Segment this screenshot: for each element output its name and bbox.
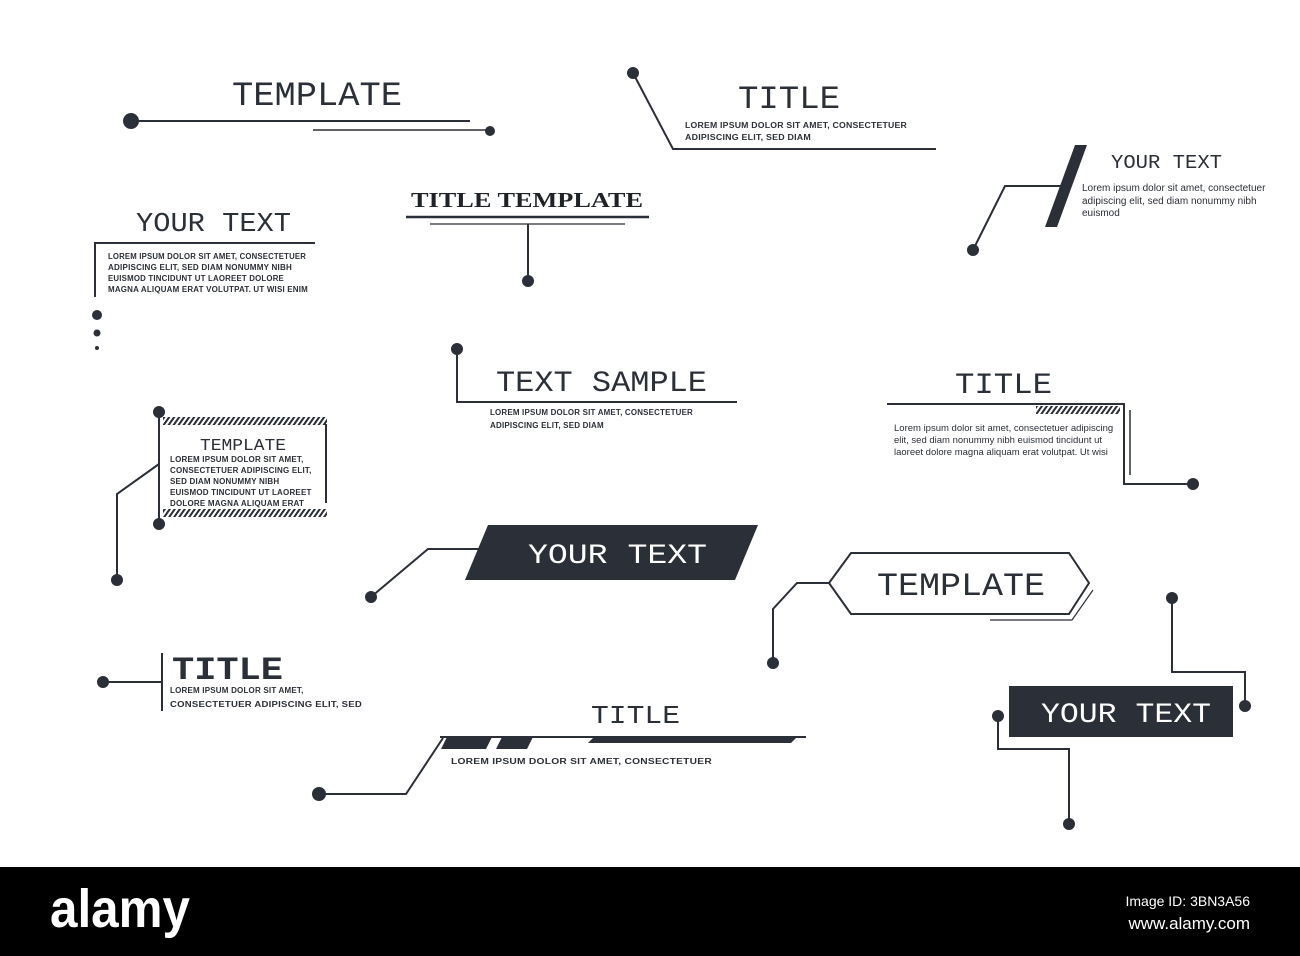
block: your text top right: YOUR TEXT <box>1111 152 1222 174</box>
block: template box: EUISMOD TINCIDUNT UT LAOREET <box>170 488 312 497</box>
block: title bottom left <box>98 652 362 711</box>
block: template hexagon: TEMPLATE <box>877 568 1045 605</box>
block: title bottom center: TITLE <box>591 701 680 731</box>
footer bar: alamy <box>50 879 190 939</box>
block: template box: DOLORE MAGNA ALIQUAM ERAT <box>170 499 304 508</box>
block: title top center: ADIPISCING ELIT, SED DIAM <box>685 133 811 142</box>
block: template box <box>112 407 327 585</box>
block: template hexagon <box>768 553 1093 668</box>
block: your text top right: euismod <box>1082 208 1120 219</box>
block: text sample: TEXT SAMPLE <box>496 367 707 401</box>
block: your text left <box>92 210 315 350</box>
block: your text left: MAGNA ALIQUAM ERAT VOLUTPAT. UT WISI ENIM <box>108 285 308 294</box>
block: title right middle: laoreet dolore magna aliquam erat volutpat. Ut wisi <box>894 447 1108 458</box>
block: title right middle: TITLE <box>955 369 1052 403</box>
block: template box: LOREM IPSUM DOLOR SIT AMET, <box>170 455 304 464</box>
block: template box: SED DIAM NONUMMY NIBH <box>170 477 279 486</box>
block: title bottom left: LOREM IPSUM DOLOR SIT AMET, <box>170 686 304 695</box>
block: title top center <box>628 68 936 149</box>
block: title right middle: elit, sed diam nonummy nibh euismod tincidunt ut <box>894 435 1102 446</box>
block: your text top right: adipiscing elit, sed diam nonummy nibh <box>1082 196 1257 207</box>
block: your text left: YOUR TEXT <box>136 210 291 240</box>
footer bar <box>0 867 1300 956</box>
block: title top center: LOREM IPSUM DOLOR SIT AMET, CONSECTETUER <box>685 121 907 130</box>
block: title template <box>406 188 649 286</box>
block: template top left: TEMPLATE <box>232 78 402 116</box>
block: title right middle: Lorem ipsum dolor sit amet, consectetuer adipiscing <box>894 423 1113 434</box>
block: text sample: LOREM IPSUM DOLOR SIT AMET, CONSECTETUER <box>490 408 693 417</box>
block: title template: TITLE TEMPLATE <box>411 188 643 212</box>
block: your text top right <box>968 145 1266 255</box>
block: your text box bottom right <box>993 593 1250 829</box>
block: template box: TEMPLATE <box>200 437 286 456</box>
block: your text left: ADIPISCING ELIT, SED DIAM NONUMMY NIBH <box>108 263 292 272</box>
footer bar: Image ID: 3BN3A56 <box>1125 893 1250 909</box>
block: title top center: TITLE <box>738 81 840 118</box>
block: your text banner <box>366 525 758 602</box>
block: title bottom center <box>313 701 806 800</box>
block: your text banner: YOUR TEXT <box>528 541 707 572</box>
block: title bottom left: TITLE <box>172 652 283 689</box>
block: your text left: LOREM IPSUM DOLOR SIT AMET, CONSECTETUER <box>108 252 306 261</box>
block: text sample <box>452 344 737 430</box>
block: title bottom center: LOREM IPSUM DOLOR SIT AMET, CONSECTETUER <box>451 757 712 766</box>
block: template box: CONSECTETUER ADIPISCING ELIT, <box>170 466 312 475</box>
block: title bottom left: CONSECTETUER ADIPISCING ELIT, SED <box>170 700 362 709</box>
block: text sample: ADIPISCING ELIT, SED DIAM <box>490 421 604 430</box>
block: title right middle <box>887 369 1198 489</box>
footer bar: www.alamy.com <box>1127 914 1250 933</box>
block: your text left: EUISMOD TINCIDUNT UT LAOREET DOLORE <box>108 274 284 283</box>
block: template top left <box>124 78 494 135</box>
block: your text top right: Lorem ipsum dolor sit amet, consectetuer <box>1082 183 1266 194</box>
block: your text box bottom right: YOUR TEXT <box>1041 700 1211 731</box>
